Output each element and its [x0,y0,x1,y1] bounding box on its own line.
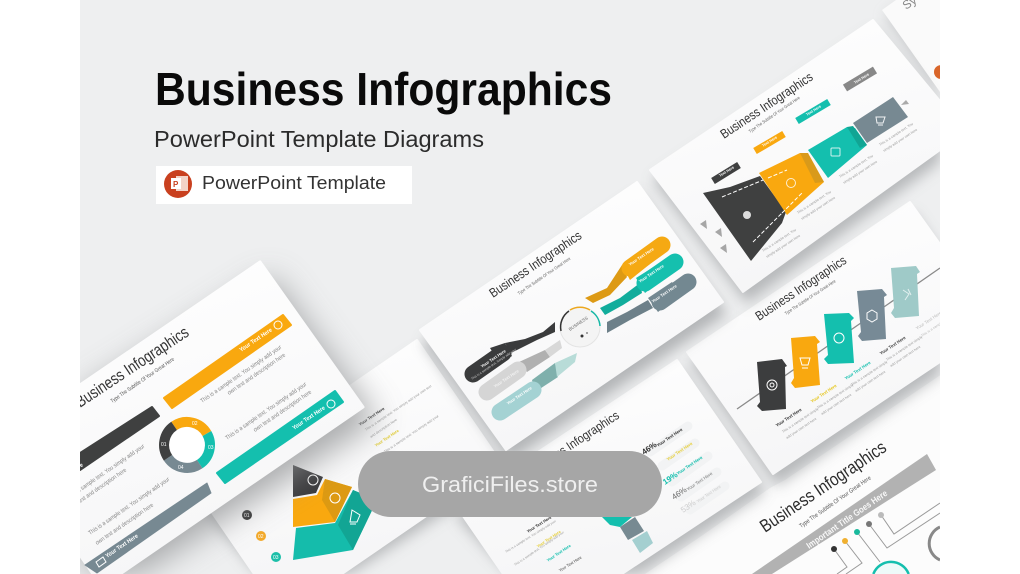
ribbon captions: This is a sample [920,321,944,338]
number dots [242,510,281,562]
body text blocks: This is a sample text. You simply add your [88,477,171,537]
donut chart: 04 [178,465,184,471]
bar: dark: Your Text Here [50,462,85,489]
funnel captions: This is a sample text. You [796,190,832,215]
ribbon captions: Your Text Here [775,407,803,428]
ribbon and pill: dark: Your Text Here [480,348,507,369]
ribbon captions: add your own text here [785,417,817,440]
funnel labels: Text Here [805,104,822,117]
slide: centre radial [420,182,727,462]
ribbon and pill: light teal: Your Text Here [506,385,533,406]
teal ring [873,562,909,574]
ribbon and pill: teal: Your Text Here [638,263,665,284]
bar: slate: Your Text Here [105,533,140,560]
ribbon captions: This is a sample text simply [850,360,888,387]
ribbon and pill: dark: This is a sample text. Simply add your [470,347,518,381]
ribbon captions: This is a sample text simply [885,335,923,362]
slide: top right funnel [650,20,940,304]
ribbon: light teal [891,266,920,318]
donut chart: 02 [192,421,198,427]
left captions: Your Text Here [526,514,553,534]
body text blocks: own text and description here [227,352,287,397]
slide title: Business Infographics [486,227,585,300]
body text blocks: This is a sample text. You simply add your [225,382,308,442]
left arrows [700,220,727,253]
funnel labels: Text Here [761,135,778,148]
funnel: amber [759,153,824,215]
row backgrounds [654,422,692,446]
row values: 46% [640,440,658,457]
title: Business Infographics [155,63,612,115]
ribbon captions: add your own text here [889,345,921,368]
watermark pill: GraficiFiles.store [422,472,598,497]
pyramid: dark tip [293,465,323,497]
bar: slate [85,483,211,573]
captions: and description here [369,418,398,439]
left captions: This is a sample text. You simply add your [513,530,566,567]
slide: left behind with 3D pyramid [197,340,506,574]
captions: This is a sample text. You simply add your [383,414,440,454]
stacked icon squares [602,517,653,553]
slide subtitle: Type The Subtitle Of Your Great Here [784,278,837,316]
badge [156,166,412,204]
title band: Important Title Goes Here [804,488,889,551]
body text blocks: own text and description here [95,502,155,547]
ribbon and pill: slate [607,282,688,333]
slide title: Business Infographics [752,252,849,324]
row values: Your Text Here [696,484,722,504]
row values: Your Text Here [686,471,714,492]
donut chart: 03 [208,445,214,451]
bar: dark [50,407,159,489]
slide: left donut [50,262,378,574]
funnel: dark [703,176,786,261]
ribbon captions: add your own text here [820,393,852,416]
arrow [901,100,909,105]
centre circle [560,307,600,347]
ribbon captions: Your Text Here [844,360,872,381]
funnel captions: This is a sample text. You [838,154,874,179]
ribbon and pill: amber [585,245,662,303]
row values: 46% [670,485,688,502]
slide title: Business Infographics [524,408,622,480]
icon: PowerPoint: P [173,180,179,189]
captions: This is a sample text. You simply add your own text [364,384,432,432]
slide: far top right [882,0,940,94]
bar: amber: Your Text Here [239,327,274,354]
pyramid: amber layer [293,479,352,527]
row values: 53% [679,498,697,515]
row values: 19% [661,470,679,487]
row values [640,427,722,515]
body text blocks [63,345,313,547]
ribbon: dark [757,359,787,411]
slide subtitle: Type The Subtitle Of Your Great Here [799,475,873,530]
funnel captions: simply add your own here [882,128,918,153]
bar: teal [217,391,343,483]
watermark pill [358,451,662,517]
captions: Your Text Here [374,428,400,448]
left captions [504,514,583,573]
slide subtitle: Type The Subtitle Of Your Great Here [110,357,176,405]
left captions: Your Text Here [558,554,583,573]
grey ring [929,527,940,560]
ribbon captions [775,310,944,440]
connector dots [831,512,884,552]
funnel captions: simply add your own here [842,160,878,185]
body text blocks: own text and description here [68,467,128,512]
ribbon and pill: slate: Your Text Here [651,283,678,304]
title band [752,454,936,574]
centre circle: BUSINESS [568,315,589,332]
funnel: teal [808,126,867,178]
funnel captions [761,122,918,259]
bar: amber [164,315,291,408]
pyramid: teal layer [293,490,377,560]
ribbon captions: Your Text Here [810,383,838,404]
icon: PowerPoint [164,170,192,198]
number dots: 01 [244,513,250,519]
body text blocks: This is a sample text. You simply add your [200,345,283,405]
ribbon captions: This is a sample text simply [781,407,819,434]
ribbon captions: Your Text Here [915,310,943,331]
slide subtitle: Type The Subtitle Of Your Great Here [517,256,572,296]
body text blocks: own text and description here [253,389,313,434]
funnel labels: Text Here [853,72,870,85]
row values: Your Text Here [656,427,684,448]
funnel captions: This is a sample text. You [761,228,797,253]
slide: percentage rows [456,360,765,574]
slide title: Business Infographics [72,323,192,411]
ribbon captions: Your Text Here [879,335,907,356]
slide title: Business Infographics [717,69,816,141]
slide: mid right [687,202,944,486]
ribbon and pill: teal [600,262,675,315]
bar: teal: Your Text Here [292,405,327,432]
donut chart: 01 [161,442,167,448]
ribbon: slate [857,289,887,341]
captions [358,384,440,454]
row values: Your Text Here [676,455,704,476]
left captions: Your Text Here [546,543,572,563]
ribbon and pill: light grey [487,340,562,392]
subtitle: PowerPoint Template Diagrams [154,126,484,152]
ribbon and pill: light grey: Your Text Here [493,368,520,389]
captions: Your Text Here [358,406,386,427]
connector lines [834,503,940,574]
ribbon and pill: dark [470,322,555,381]
ribbon and pill: light teal [500,353,577,412]
number dots: 02 [258,534,264,540]
row values: Your Text Here [666,441,694,462]
left captions: This is a sample text. You simply add your [504,519,558,554]
funnel captions: This is a sample text. You [878,122,914,147]
funnel: slate [853,97,908,143]
ribbon and pill: amber: Your Text Here [628,246,655,267]
body text blocks: This is a sample text. You simply add your [63,444,146,504]
funnel captions: simply add your own here [765,234,801,259]
donut chart [161,421,214,471]
funnel captions: simply add your own here [800,196,836,221]
ribbon: amber [791,336,820,388]
number dots: 03 [273,555,279,561]
funnel labels: Text Here [718,165,735,178]
slide subtitle: Type The Subtitle Of Your Great Here [748,95,801,134]
slide title: Business Infographics [756,437,890,536]
left captions: Your Text Here [536,529,562,549]
ribbon: teal [824,313,854,364]
badge: PowerPoint Template [202,173,386,193]
ribbon captions: This is a sample text simply [816,383,854,410]
slide: bottom right [645,372,945,574]
funnel labels [713,70,875,181]
ribbon captions: add your own text here [854,370,886,393]
